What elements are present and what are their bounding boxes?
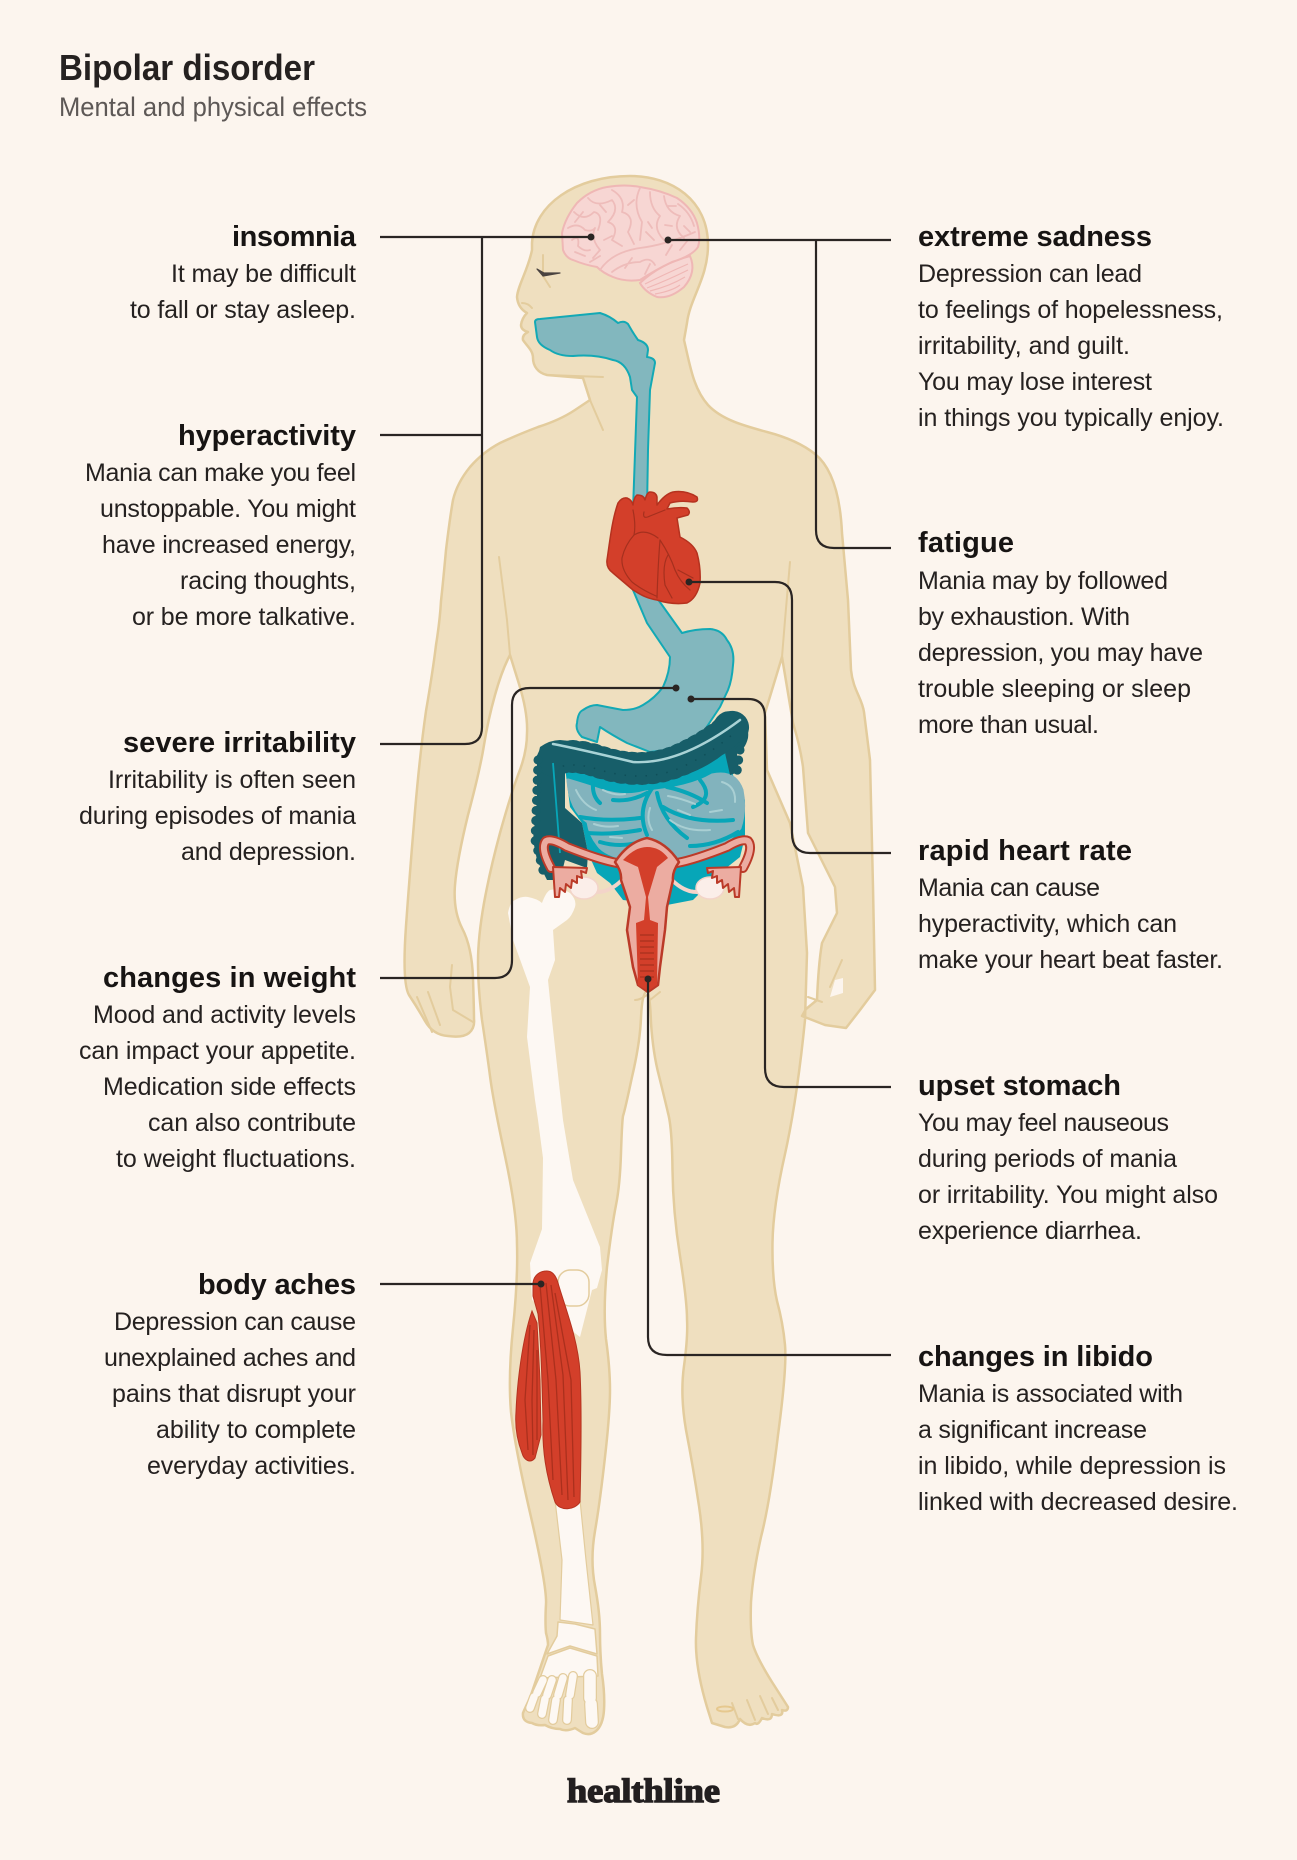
line: You may lose interest (918, 368, 1152, 396)
line: to weight fluctuations. (116, 1145, 356, 1173)
line: or irritability. You might also (918, 1181, 1218, 1209)
large intestine (533, 711, 748, 880)
brain (562, 186, 699, 297)
teal gaps between loops (580, 780, 738, 846)
mouth, pharynx and stomach (535, 313, 733, 752)
line: by exhaustion. With (918, 603, 1130, 631)
mesentery background (565, 753, 745, 905)
line: during periods of mania (918, 1145, 1177, 1173)
heart shape (607, 492, 700, 604)
connector: body aches (380, 1283, 541, 1285)
femur (508, 889, 602, 1337)
line: hyperactivity, which can (918, 910, 1177, 938)
right hand gap (830, 978, 843, 997)
small calf muscle (516, 1311, 541, 1461)
uterine cavity (623, 847, 668, 991)
panel: rapid heart rate (918, 835, 1223, 974)
line: unexplained aches and (104, 1344, 356, 1372)
body silhouette (405, 176, 875, 1734)
heading: changes in libido (918, 1341, 1153, 1373)
connector: changes in weight (380, 688, 676, 978)
line: racing thoughts, (180, 567, 356, 595)
heart vessels (622, 510, 693, 598)
line: have increased energy, (102, 531, 356, 559)
fimbriae (553, 867, 587, 897)
body figure (405, 176, 875, 1734)
connector lines (380, 237, 891, 1355)
panel: body aches (104, 1269, 356, 1480)
heading: rapid heart rate (918, 835, 1132, 867)
cerebellum (640, 256, 692, 297)
panel: fatigue (918, 527, 1203, 739)
title (59, 47, 367, 122)
muscle fibres (525, 1283, 574, 1500)
line: and depression. (181, 838, 356, 866)
connector dots (538, 234, 694, 1288)
heading: body aches (198, 1269, 356, 1301)
heading: Bipolar disorder: Bipolar disorder (59, 47, 315, 88)
line: trouble sleeping or sleep (918, 675, 1191, 703)
connector: rapid heart rate (689, 582, 891, 853)
line: make your heart beat faster. (918, 946, 1223, 974)
line: pains that disrupt your (112, 1380, 356, 1408)
heading: changes in weight (103, 962, 356, 994)
ascending colon (533, 755, 588, 880)
line: or be more talkative. (132, 603, 356, 631)
line: unstoppable. You might (100, 495, 356, 523)
line: everyday activities. (147, 1452, 356, 1480)
heading: hyperactivity (178, 420, 356, 452)
line: can impact your appetite. (79, 1037, 356, 1065)
connector: extreme sadness and fatigue (668, 240, 891, 548)
connector: insomnia (380, 236, 591, 238)
panel: changes in weight (79, 962, 356, 1173)
uterus and vagina (615, 838, 679, 992)
line: depression, you may have (918, 639, 1203, 667)
panel: changes in libido (918, 1341, 1238, 1516)
subtitle: Mental and physical effects (59, 92, 367, 122)
vaginal ridges (640, 935, 654, 977)
pharynx and esophagus (535, 313, 655, 510)
colon haustra (553, 727, 733, 768)
line: in libido, while depression is (918, 1452, 1226, 1480)
line: Mania can make you feel (85, 459, 356, 487)
line: irritability, and guilt. (918, 332, 1130, 360)
patella (558, 1270, 589, 1306)
heading: upset stomach (918, 1070, 1121, 1102)
bones of the leg (508, 889, 602, 1722)
line: to feelings of hopelessness, (918, 296, 1223, 324)
line: Irritability is often seen (108, 766, 356, 794)
colon streak (553, 720, 740, 762)
panel: insomnia (130, 221, 357, 324)
small intestine mass (568, 774, 744, 862)
heading: extreme sadness (918, 221, 1152, 253)
line: Mania is associated with (918, 1380, 1183, 1408)
heart (607, 492, 700, 604)
ankle and foot bones (540, 1622, 598, 1678)
line: in things you typically enjoy. (918, 404, 1224, 432)
connector: changes in libido (648, 979, 891, 1355)
heading: fatigue (918, 527, 1014, 559)
line: linked with decreased desire. (918, 1488, 1238, 1516)
line: Depression can lead (918, 260, 1142, 288)
cerebrum (562, 186, 699, 281)
ligaments and ovaries (597, 880, 697, 892)
connector: hyperactivity and irritability (380, 237, 482, 744)
brain folds (568, 188, 695, 274)
logo: healthline: healthline (567, 1773, 720, 1810)
line: Mania can cause (918, 874, 1100, 902)
reproductive organs (544, 838, 750, 992)
body contour lines (417, 255, 842, 1720)
panel: hyperactivity (85, 420, 356, 631)
icon: closed eye (537, 269, 560, 276)
heading: insomnia (232, 221, 357, 253)
line: to fall or stay asleep. (130, 296, 356, 324)
transverse colon (537, 711, 748, 782)
panel: upset stomach (918, 1070, 1218, 1245)
calf muscle (533, 1271, 581, 1509)
line: more than usual. (918, 711, 1099, 739)
stomach (577, 590, 733, 752)
line: It may be difficult (171, 260, 356, 288)
heading: severe irritability (123, 727, 356, 759)
tibia and fibula (555, 1500, 593, 1625)
line: ability to complete (156, 1416, 356, 1444)
intestine highlights (576, 782, 735, 838)
line: Depression can cause (114, 1308, 356, 1336)
connector: upset stomach (691, 699, 891, 1087)
panel: severe irritability (79, 727, 356, 866)
line: can also contribute (148, 1109, 356, 1137)
line: experience diarrhea. (918, 1217, 1142, 1245)
line: a significant increase (918, 1416, 1147, 1444)
line: during episodes of mania (79, 802, 356, 830)
line: Mania may by followed (918, 567, 1168, 595)
line: Medication side effects (103, 1073, 356, 1101)
panel: extreme sadness (918, 221, 1224, 432)
fallopian tubes (544, 840, 750, 868)
line: You may feel nauseous (918, 1109, 1169, 1137)
intestines (533, 711, 748, 905)
line: Mood and activity levels (93, 1001, 356, 1029)
leg muscles (516, 1271, 581, 1509)
